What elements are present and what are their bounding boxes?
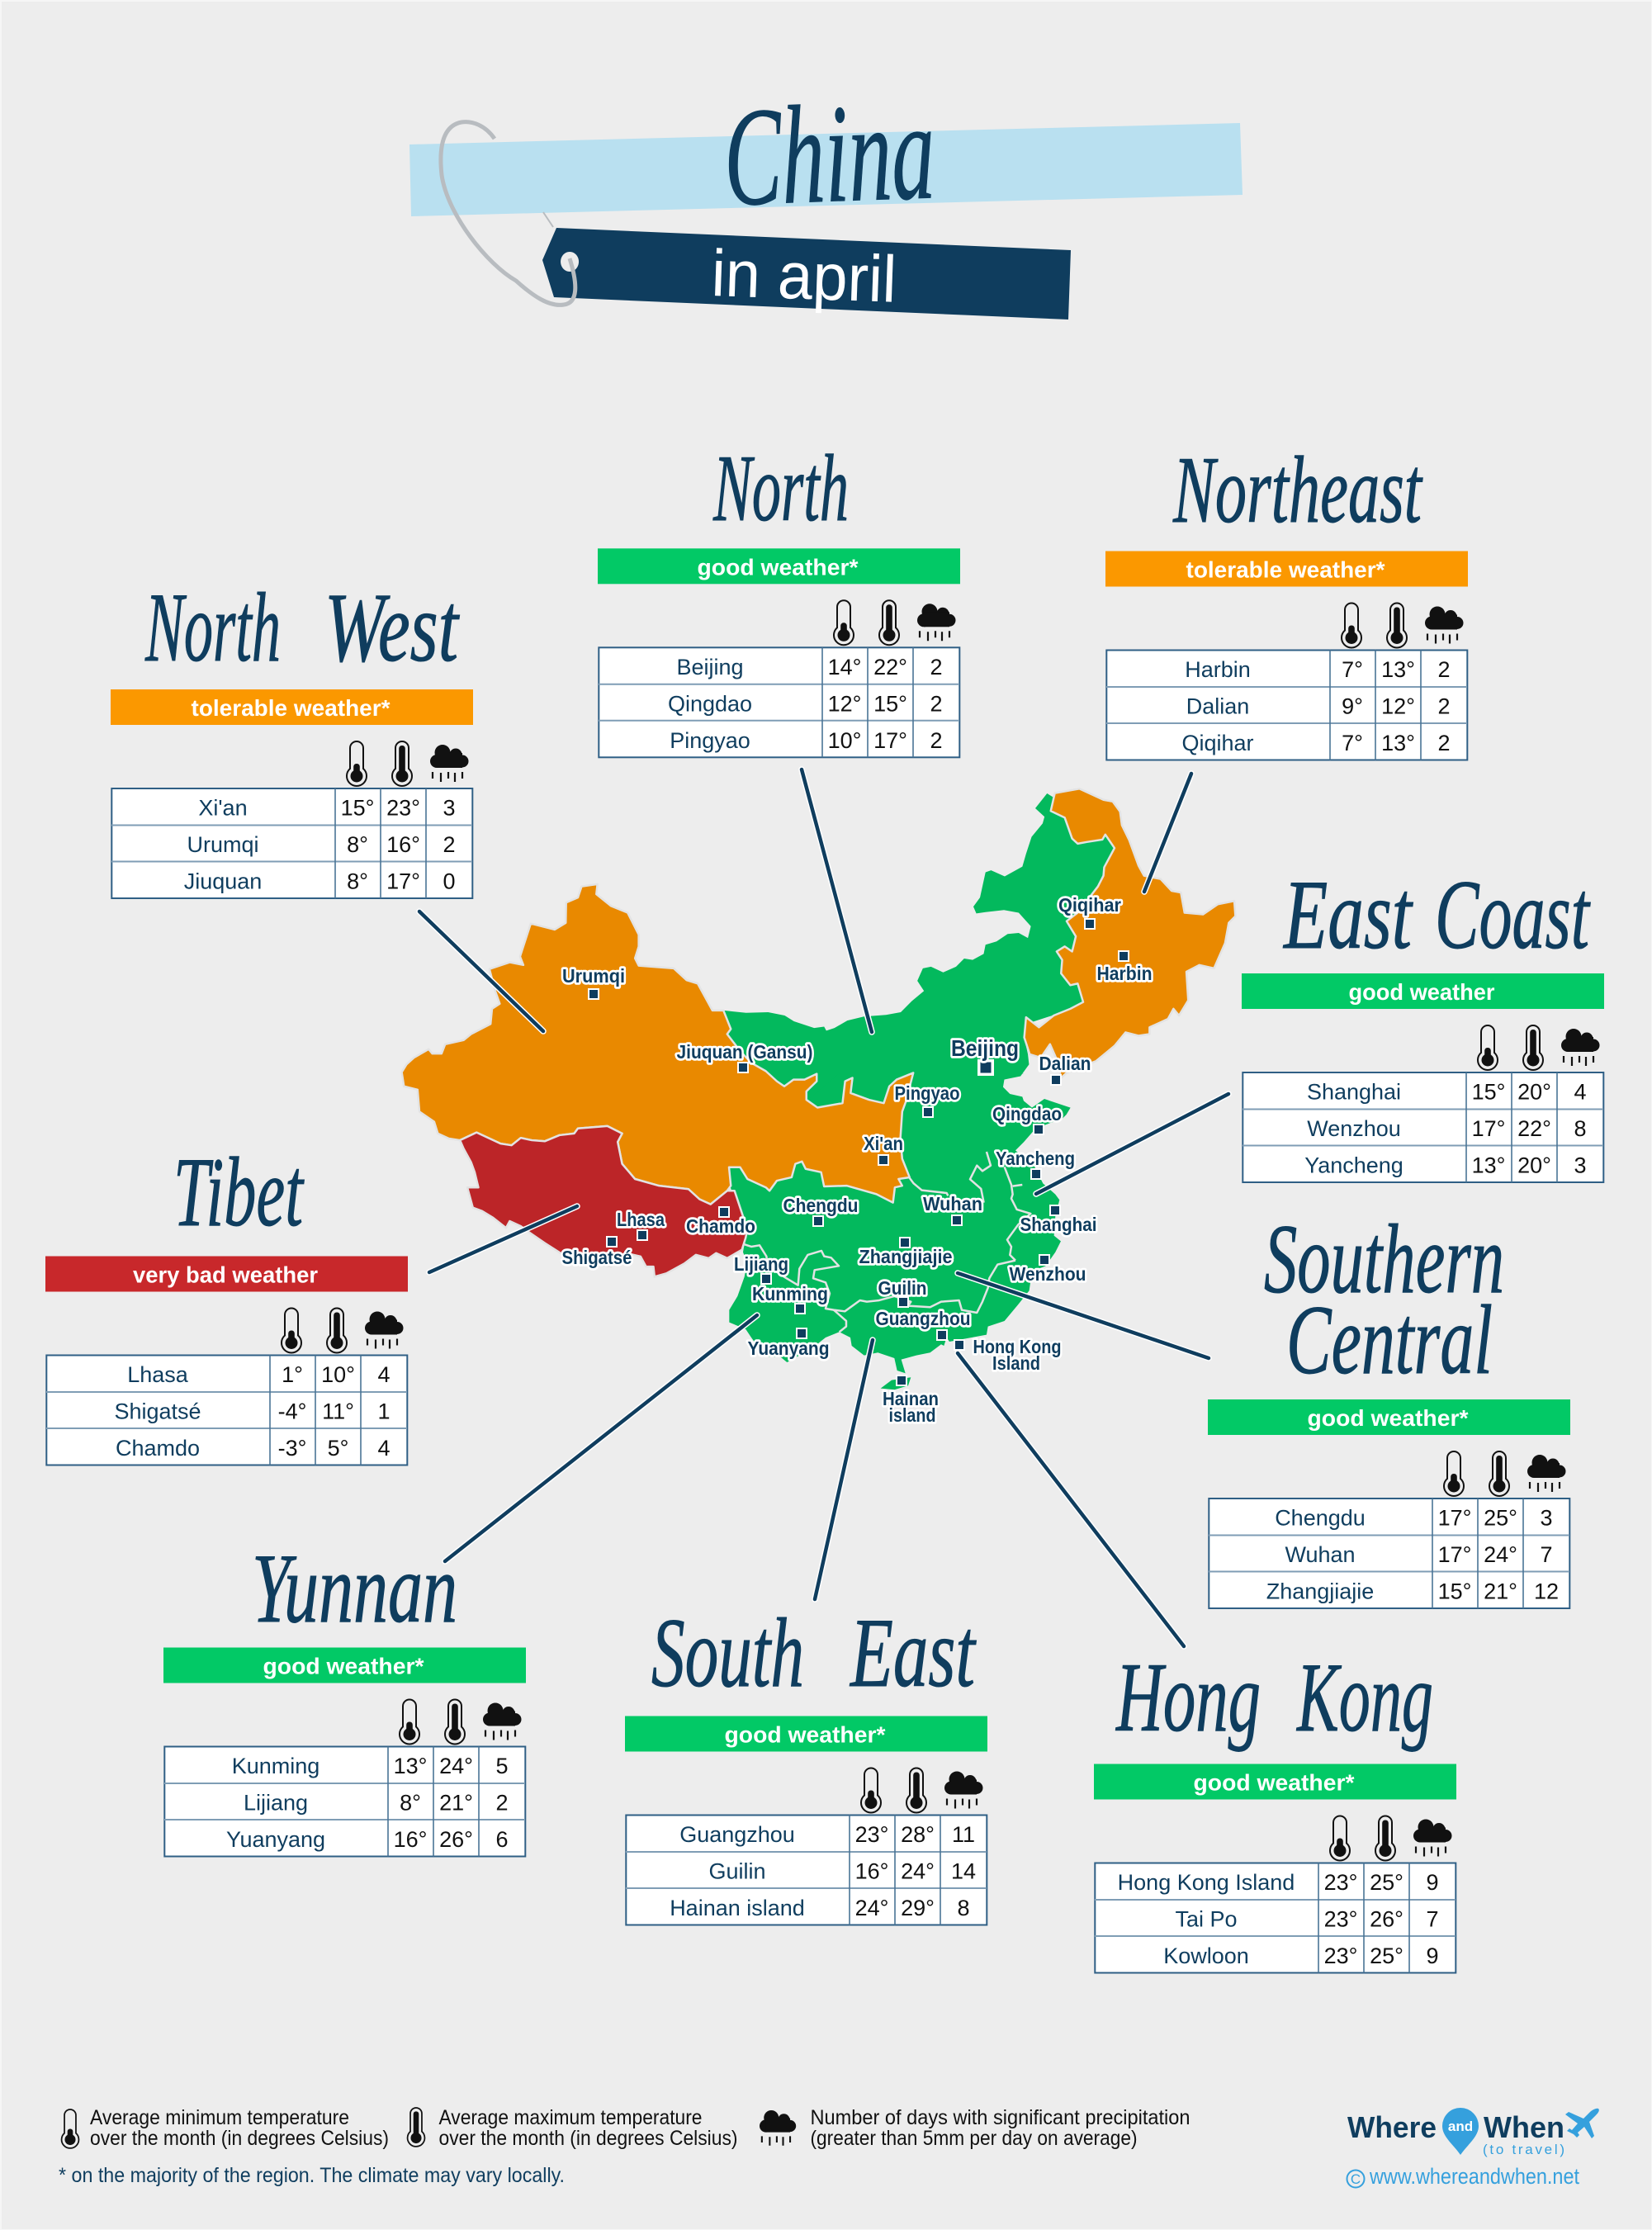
city rows: 4	[377, 1362, 391, 1387]
city: Beijing: Beijing	[951, 1035, 1019, 1061]
city: Chamdo	[686, 1208, 755, 1237]
city: Guilin	[878, 1277, 926, 1306]
city rows: 8°	[347, 869, 368, 893]
city: Wuhan: Wuhan	[923, 1193, 982, 1214]
panel: South East	[625, 1716, 987, 1925]
city rows: 7	[1540, 1542, 1553, 1567]
panel: East Coast	[1242, 973, 1604, 1182]
heading: South East: East	[850, 1598, 977, 1707]
city rows: 3	[443, 796, 456, 821]
city rows: Tai Po	[1175, 1907, 1238, 1932]
city rows: 10°	[828, 728, 861, 753]
city rows: Zhangjiajie	[1266, 1579, 1374, 1603]
city rows: 29°	[901, 1896, 935, 1920]
city rows: 23°	[1324, 1870, 1357, 1895]
city rows	[1266, 1506, 1559, 1603]
city rows: Beijing	[676, 655, 744, 679]
city rows: Shigatsé	[114, 1399, 201, 1423]
city rows: 16°	[855, 1859, 888, 1884]
city rows: 3	[1574, 1153, 1587, 1177]
city: Qiqihar	[1058, 894, 1121, 928]
city rows: Chengdu	[1275, 1506, 1366, 1531]
city: Wenzhou: Wenzhou	[1009, 1263, 1086, 1285]
city rows	[184, 796, 456, 893]
footnote: * on the majority of the region. The climate may vary locally.	[59, 2164, 565, 2187]
weather band	[625, 1716, 987, 1752]
weather band: good weather*	[263, 1653, 424, 1679]
city: Qingdao	[992, 1103, 1062, 1134]
city: Harbin: Harbin	[1096, 963, 1153, 984]
orange: north east region	[1025, 788, 1235, 1078]
city rows: 14	[951, 1859, 976, 1884]
city: Guangzhou: Guangzhou	[875, 1308, 971, 1329]
heading: Tibet: Tibet	[173, 1137, 305, 1247]
city rows: Chamdo	[116, 1436, 200, 1461]
heading: Hong Kong: Hong	[1115, 1642, 1261, 1752]
city rows: Yancheng	[1304, 1153, 1403, 1177]
legend: maximum temperature: Average maximum temperature	[439, 2106, 702, 2129]
city rows: Guilin	[708, 1859, 766, 1884]
city rows: 7°	[1342, 657, 1363, 682]
city: Chamdo: Chamdo	[686, 1215, 755, 1237]
city rows: Wuhan	[1285, 1542, 1356, 1567]
region borders	[743, 1152, 1030, 1332]
city rows: 8	[957, 1896, 970, 1920]
city rows	[1304, 1080, 1587, 1177]
logo wordmark left: Where	[1347, 2110, 1437, 2144]
heading: Southern Central: Southern	[1264, 1204, 1504, 1314]
city rows: Hainan island	[670, 1896, 805, 1920]
city rows: 17°	[386, 869, 420, 893]
city rows: Lhasa	[127, 1362, 189, 1387]
city rows: 17°	[1438, 1506, 1471, 1531]
city: Dalian: Dalian	[1039, 1053, 1091, 1074]
city: Kunming	[752, 1283, 828, 1313]
city: Xi'an: Xi'an	[864, 1133, 903, 1154]
city: Chengdu	[783, 1195, 859, 1225]
city rows: 13°	[1381, 731, 1415, 755]
heading: South East	[651, 1598, 977, 1707]
city rows: Kowloon	[1163, 1944, 1249, 1968]
weather band: tolerable weather*	[192, 695, 391, 721]
city: Yancheng	[996, 1148, 1075, 1178]
city rows	[114, 1362, 391, 1461]
city rows: 24°	[439, 1754, 473, 1778]
city rows: 26°	[1370, 1907, 1403, 1932]
logo tagline: (to travel)	[1483, 2142, 1564, 2157]
city rows: 21°	[1484, 1579, 1517, 1603]
city: Lhasa	[617, 1209, 665, 1239]
city rows: 23°	[386, 796, 420, 821]
heading: Yunnan: Yunnan	[252, 1533, 457, 1643]
city rows: 2	[930, 691, 943, 716]
pointer lines	[419, 769, 1228, 1646]
weather band	[1242, 973, 1604, 1009]
city: Pingyao: Pingyao	[895, 1082, 959, 1104]
city rows: 25°	[1370, 1870, 1403, 1895]
city rows: Qingdao	[668, 691, 752, 716]
city: Lijiang: Lijiang	[734, 1253, 788, 1275]
weather band: very bad weather	[133, 1262, 318, 1288]
title: China: China	[722, 73, 937, 235]
city rows: 17°	[873, 728, 907, 753]
heading: Southern Central: Central	[1286, 1285, 1493, 1394]
city rows: 7	[1426, 1907, 1439, 1932]
weather band	[1105, 552, 1468, 586]
city: Yuanyang: Yuanyang	[748, 1338, 829, 1359]
city rows: 11°	[322, 1399, 354, 1423]
city: Kunming: Kunming	[752, 1283, 828, 1304]
heading: Southern Central	[1264, 1204, 1504, 1394]
city rows: Shanghai	[1307, 1080, 1401, 1105]
legend: minimum temperature	[62, 2106, 389, 2150]
city: Dalian	[1039, 1053, 1091, 1084]
city rows: 12	[1534, 1579, 1559, 1603]
red: Tibet region	[460, 1126, 747, 1276]
city rows: 15°	[341, 796, 374, 821]
city: Hainan island: island	[888, 1404, 936, 1426]
city rows: 15°	[1438, 1579, 1471, 1603]
city: Urumqi	[562, 965, 625, 998]
city rows	[226, 1754, 509, 1852]
legend: maximum temperature	[408, 2106, 738, 2150]
city rows: 2	[930, 655, 943, 679]
icon: plane	[1565, 2109, 1599, 2138]
city: Xi'an	[864, 1133, 903, 1164]
city rows: 2	[1437, 694, 1451, 718]
city rows: 21°	[439, 1790, 473, 1815]
city rows: Lijiang	[244, 1790, 308, 1815]
city rows: 13°	[394, 1754, 427, 1778]
panel: Yunnan	[163, 1648, 526, 1856]
city rows: Qiqihar	[1181, 731, 1254, 755]
legend: precipitation: (greater than 5mm per day on average)	[811, 2127, 1138, 2150]
panel: North West	[111, 689, 473, 898]
city rows: 9	[1426, 1870, 1439, 1895]
city rows: 22°	[1517, 1116, 1551, 1141]
heading: Northeast: Northeast	[1172, 438, 1423, 542]
heading: North West: North	[144, 572, 281, 682]
panel: North	[598, 548, 960, 757]
city rows	[1181, 657, 1451, 755]
heading: South East: South	[651, 1598, 804, 1707]
city rows: 11	[952, 1822, 975, 1847]
city rows: 9	[1426, 1944, 1439, 1968]
city: Hong Kong Island	[955, 1336, 1062, 1374]
city rows: 1	[377, 1399, 391, 1423]
city: Shigatsé	[561, 1238, 632, 1268]
map of China	[402, 769, 1235, 1646]
city rows: 24°	[901, 1859, 935, 1884]
navy tag	[542, 228, 1071, 320]
city rows: 12°	[1381, 694, 1415, 718]
panel: Northeast	[1105, 552, 1468, 760]
city rows: 7°	[1342, 731, 1363, 755]
heading: East Coast	[1283, 859, 1591, 969]
city: Jiuquan: Jiuquan (Gansu)	[677, 1041, 812, 1063]
city rows: 28°	[901, 1822, 935, 1847]
city rows: 15°	[1472, 1080, 1505, 1105]
city rows: 6	[495, 1827, 509, 1852]
panel: Hong Kong	[1094, 1764, 1456, 1973]
city: Guilin: Guilin	[878, 1277, 926, 1299]
city rows: Guangzhou	[679, 1822, 795, 1847]
city: Lhasa: Lhasa	[617, 1209, 665, 1230]
city rows: 20°	[1517, 1153, 1551, 1177]
city rows: 9°	[1342, 694, 1363, 718]
city rows: 26°	[439, 1827, 473, 1852]
heading: North West: West	[324, 572, 460, 682]
light blue title band	[409, 123, 1243, 216]
city: Harbin	[1096, 952, 1153, 984]
city: Wuhan	[923, 1193, 982, 1224]
city rows: 20°	[1517, 1080, 1551, 1105]
city rows: 17°	[1472, 1116, 1505, 1141]
city: Urumqi: Urumqi	[562, 965, 625, 987]
city rows: 22°	[873, 655, 907, 679]
city rows: Hong Kong Island	[1118, 1870, 1295, 1895]
city rows: 0	[443, 869, 456, 893]
weather band	[598, 548, 960, 584]
logo: Where and When	[1347, 2108, 1599, 2189]
city rows: 10°	[321, 1362, 355, 1387]
weather band	[111, 689, 473, 725]
logo wordmark right: When	[1484, 2110, 1564, 2144]
city: Lijiang	[734, 1253, 788, 1283]
city: Zhangjiajie: Zhangjiajie	[859, 1246, 953, 1267]
heading: East Coast: East	[1283, 859, 1413, 969]
city: Wenzhou	[1009, 1256, 1086, 1285]
city rows: 16°	[394, 1827, 427, 1852]
green regions	[724, 793, 1115, 1390]
city rows: 24°	[855, 1896, 888, 1920]
city: Yancheng: Yancheng	[996, 1148, 1075, 1169]
orange: north west region	[402, 884, 913, 1205]
city rows: 8	[1574, 1116, 1587, 1141]
city rows: 13°	[1381, 657, 1415, 682]
city rows: 2	[1437, 657, 1451, 682]
weather band	[1208, 1399, 1570, 1435]
city: Qiqihar: Qiqihar	[1058, 894, 1121, 916]
legend: precipitation: Number of days with significant precipitation	[811, 2106, 1190, 2129]
city rows	[668, 655, 943, 753]
city rows	[670, 1822, 976, 1920]
logo pin: and	[1448, 2119, 1473, 2134]
weather band	[1094, 1764, 1456, 1800]
city: Shanghai: Shanghai	[1020, 1214, 1096, 1235]
city rows: 23°	[1324, 1907, 1357, 1932]
weather band: good weather	[1349, 979, 1495, 1005]
city rows: 5	[495, 1754, 509, 1778]
city: Guangzhou	[875, 1308, 971, 1339]
logo pin	[1442, 2108, 1479, 2155]
city rows: Jiuquan	[184, 869, 262, 893]
legend: maximum temperature: over the month (in degrees Celsius)	[439, 2127, 738, 2150]
city rows: 8°	[347, 832, 368, 857]
city: Chengdu: Chengdu	[783, 1195, 859, 1216]
city rows: 2	[495, 1790, 509, 1815]
city rows	[1118, 1870, 1439, 1968]
city rows: 12°	[828, 691, 861, 716]
city rows: Urumqi	[187, 832, 259, 857]
city rows: 16°	[386, 832, 420, 857]
city rows: 4	[1574, 1080, 1587, 1105]
city: Pingyao	[895, 1082, 959, 1116]
city rows: Dalian	[1186, 694, 1249, 718]
city rows: 3	[1540, 1506, 1553, 1531]
city rows: 5°	[328, 1436, 348, 1461]
city rows: Wenzhou	[1307, 1116, 1401, 1141]
heading: Hong Kong: Kong	[1296, 1642, 1433, 1752]
city rows: 23°	[855, 1822, 888, 1847]
city: Shanghai	[1020, 1206, 1096, 1235]
city rows: 25°	[1484, 1506, 1517, 1531]
city rows: 17°	[1438, 1542, 1471, 1567]
city: Beijing	[951, 1035, 1019, 1073]
city rows: 23°	[1324, 1944, 1357, 1968]
weather band: good weather*	[1308, 1405, 1469, 1431]
city rows: 24°	[1484, 1542, 1517, 1567]
city: Hong Kong Island: Hong Kong	[973, 1336, 1062, 1357]
city: Shigatsé: Shigatsé	[561, 1247, 632, 1268]
weather band	[45, 1257, 408, 1291]
tag ring	[441, 122, 575, 305]
city rows: Harbin	[1185, 657, 1251, 682]
city: Hainan island: Hainan	[883, 1388, 939, 1409]
city rows: 15°	[873, 691, 907, 716]
legend: precipitation	[760, 2106, 1190, 2150]
copyright: www.whereandwhen.net	[1369, 2164, 1579, 2189]
panel: Tibet	[45, 1257, 408, 1465]
city: Qingdao: Qingdao	[992, 1103, 1062, 1124]
city rows: Yuanyang	[226, 1827, 325, 1852]
city rows: 4	[377, 1436, 391, 1461]
city rows: 8°	[400, 1790, 421, 1815]
city rows: -4°	[278, 1399, 306, 1423]
city rows: 14°	[828, 655, 861, 679]
legend: minimum temperature: Average minimum temperature	[90, 2106, 349, 2129]
weather band: tolerable weather*	[1186, 556, 1385, 583]
city rows: 25°	[1370, 1944, 1403, 1968]
city rows: Xi'an	[198, 796, 248, 821]
city: Hainan island	[883, 1376, 939, 1426]
city rows: Pingyao	[670, 728, 750, 753]
city rows: 13°	[1472, 1153, 1505, 1177]
city rows: 2	[1437, 731, 1451, 755]
weather band	[163, 1648, 526, 1683]
city rows: -3°	[278, 1436, 306, 1461]
city rows: 2	[930, 728, 943, 753]
city: Jiuquan	[677, 1041, 812, 1072]
city rows: 2	[443, 832, 456, 857]
tag string	[543, 212, 553, 227]
legend: minimum temperature: over the month (in degrees Celsius)	[90, 2127, 389, 2150]
heading: North: North	[712, 436, 849, 541]
title banner	[409, 73, 1243, 320]
copyright: C	[1351, 2171, 1361, 2187]
weather band: good weather*	[1194, 1770, 1355, 1795]
city rows: Kunming	[232, 1754, 320, 1778]
legend	[59, 2106, 1190, 2187]
weather band: good weather*	[697, 554, 859, 580]
city rows: 1°	[282, 1362, 303, 1387]
panel: Southern Central	[1208, 1399, 1570, 1608]
subtitle: in april: in april	[710, 236, 897, 316]
city: Hong Kong Island: Island	[992, 1352, 1040, 1374]
weather band: good weather*	[725, 1722, 886, 1747]
heading: Hong Kong	[1115, 1642, 1433, 1752]
city: Yuanyang	[748, 1329, 829, 1359]
